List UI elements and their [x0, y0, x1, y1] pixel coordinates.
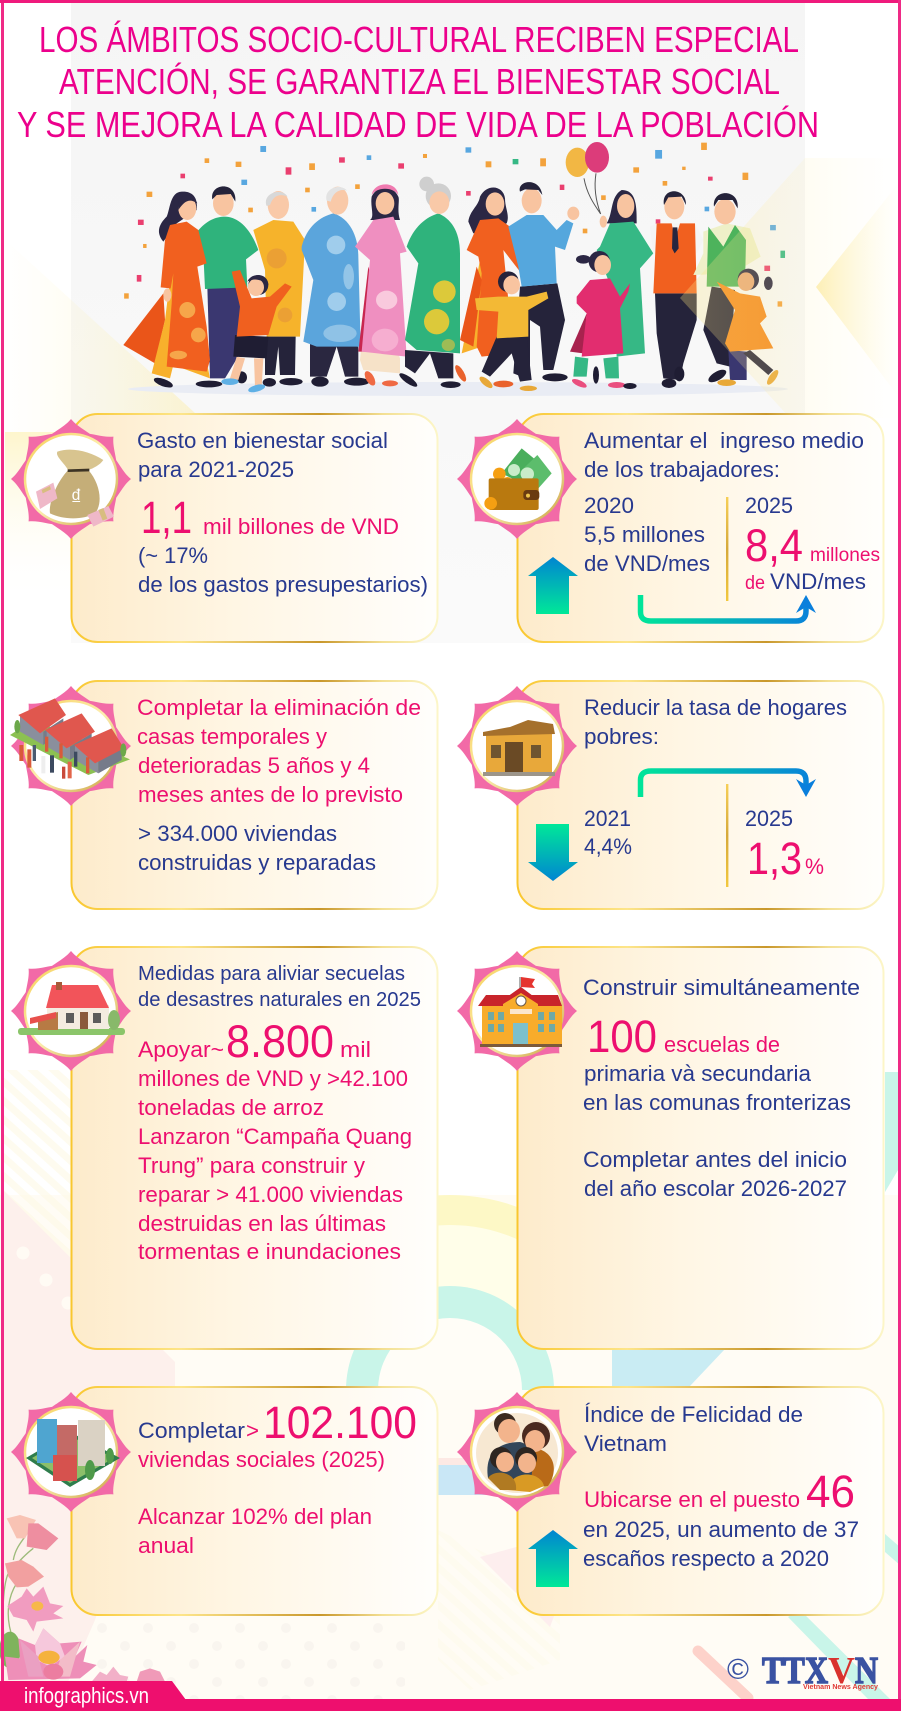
text: escuelas: Construir simultáneamente: [583, 975, 860, 1000]
right group of people: [453, 142, 780, 391]
text: escuelas: del año escolar 2026-2027: [584, 1176, 847, 1201]
text: 2020 value: 5,5 millones: [584, 522, 705, 547]
icon: money bag: [11, 419, 131, 539]
arrow: curved 2020 to 2025: [640, 595, 816, 621]
text: desastres: Trung” para construir y: [138, 1153, 366, 1178]
grandfather in blue: [302, 187, 369, 387]
text: felicidad: [583, 1402, 859, 1571]
lotus flowers bottom left: [0, 1515, 165, 1682]
girl in pink: [570, 251, 637, 389]
illustration: Vietnamese family group in ao dai: [123, 142, 788, 396]
boy in yellow: [475, 271, 548, 391]
text: escuelas: Completar antes del inicio: [583, 1147, 847, 1172]
bud flower: [7, 1515, 58, 1550]
text: viviendas: Completar: [138, 1418, 246, 1443]
panel: ingreso medio: [457, 414, 884, 642]
text: viviendas: >: [246, 1418, 259, 1443]
text: viviendas: viviendas sociales (2025): [138, 1447, 385, 1472]
logo: TTXVN: [727, 1650, 879, 1692]
icon: poor house: [457, 686, 577, 806]
child in orange: [221, 270, 292, 394]
text: felicidad: Vietnam: [584, 1431, 667, 1456]
woman in orange: [123, 192, 210, 390]
text: desastres: reparar > 41.000 viviendas: [138, 1182, 403, 1207]
balloons: [566, 142, 609, 214]
text: 2025 value: VND/mes: [770, 569, 866, 594]
text: 2025 value: 2025: [745, 493, 793, 518]
text: eliminación: Completar la eliminación de: [137, 695, 421, 720]
arrow: rank increase: [528, 1530, 578, 1587]
text: escuelas: escuelas de: [664, 1032, 780, 1057]
text: desastres: 8.800: [226, 1016, 334, 1067]
man in green vest: [693, 193, 761, 385]
text: escuelas: [583, 975, 860, 1201]
text: gasto: mil billones de VND: [203, 514, 399, 539]
text: 2025 value: millones: [810, 545, 880, 566]
grandfather in yellow: [253, 191, 305, 387]
text: gasto: [137, 428, 428, 597]
arrow: curved 2021 to 2025: [640, 771, 816, 797]
text: gasto: 1,1: [141, 492, 192, 543]
icon: school: [457, 951, 577, 1071]
text: desastres: toneladas de arroz: [138, 1095, 324, 1120]
arrow: decrease: [528, 824, 578, 881]
text: desastres: de desastres naturales en 2025: [138, 988, 421, 1011]
logo: TTXVN: N: [855, 1650, 878, 1692]
middle flower: [5, 1560, 44, 1587]
text: viviendas: [138, 1397, 417, 1558]
text: escuelas: 100: [587, 1011, 657, 1062]
large pink lotus: [5, 1628, 97, 1680]
upper pink lotus: [7, 1587, 63, 1632]
text: gasto: de los gastos presupestarios): [138, 572, 428, 597]
text: 2021 value: 4,4%: [584, 834, 632, 859]
arrow: increase: [528, 557, 578, 614]
text: desastres: mil: [340, 1037, 371, 1062]
icon: money bag: ₫: [71, 484, 82, 509]
girl in orange: [717, 269, 780, 386]
text: eliminación: construidas y reparadas: [138, 850, 376, 875]
panel: escuelas: [457, 947, 884, 1349]
panel: eliminación de casas temporales: [10, 681, 437, 909]
text: eliminación: casas temporales y: [137, 724, 328, 749]
panel: índice de felicidad: [457, 1387, 884, 1615]
text: desastres: millones de VND y >42.100: [138, 1066, 408, 1091]
text: 2025 value: de: [745, 573, 765, 594]
text: eliminación: deterioradas 5 años y 4: [138, 753, 370, 778]
icon: apartment buildings: [11, 1392, 131, 1512]
icon: happy family: [457, 1392, 577, 1512]
panel: viviendas sociales: [11, 1387, 437, 1615]
decorative yellow chevrons over the illustration: [680, 158, 901, 418]
confetti: [124, 143, 785, 307]
text: 2021 value: [584, 806, 632, 859]
text: 2020 value: de VND/mes: [584, 551, 710, 576]
man in blue: [508, 182, 579, 381]
man in orange vest: [650, 191, 703, 388]
woman in pink: [355, 184, 407, 387]
text: felicidad: Índice de Felicidad de: [584, 1402, 803, 1427]
small lotus buds at the footer: [92, 1667, 165, 1682]
left group of people: [123, 177, 461, 394]
text: felicidad: escaños respecto a 2020: [583, 1546, 829, 1571]
text: desastres: [138, 962, 421, 1264]
text: 2025 value: 2025: [745, 806, 793, 831]
text: ingreso heading: de los trabajadores:: [584, 457, 780, 482]
panel: gasto en bienestar social: [11, 414, 437, 642]
text: eliminación: > 334.000 viviendas: [138, 821, 337, 846]
grandmother in green: [398, 177, 461, 389]
icon: wallet: [457, 419, 577, 539]
woman in green: [597, 190, 653, 357]
text: desastres: destruidas en las últimas: [138, 1211, 386, 1236]
footer bar: [0, 1681, 901, 1711]
text: hogares heading: [584, 695, 847, 749]
text: 2025 value: [745, 493, 880, 594]
text: desastres: tormentas e inundaciones: [138, 1239, 401, 1264]
text: felicidad: en 2025, un aumento de 37: [583, 1517, 859, 1542]
panel: hogares pobres: [457, 681, 884, 909]
icon: house: [11, 951, 131, 1071]
text: escuelas: primaria và secundaria: [584, 1061, 811, 1086]
text: ingreso heading: Aumentar el ingreso medio: [584, 428, 864, 453]
logo: TTXVN: Vietnam News Agency: [803, 1682, 879, 1691]
text: felicidad: Ubicarse en el puesto: [584, 1487, 800, 1512]
text: hogares heading: pobres:: [584, 724, 659, 749]
text: gasto: Gasto en bienestar social: [137, 428, 388, 453]
text: desastres: Medidas para aliviar secuelas: [138, 962, 405, 985]
text: escuelas: en las comunas fronterizas: [583, 1090, 851, 1115]
text: 2025 value: 1,3: [747, 833, 802, 884]
text: 2025 value: %: [805, 854, 824, 879]
text: hogares heading: Reducir la tasa de hogares: [584, 695, 847, 720]
text: desastres: Lanzaron “Campaña Quang: [138, 1124, 412, 1149]
ground shadow: [128, 382, 788, 396]
text: ingreso heading: [584, 428, 864, 482]
icon: rebuilt houses: [10, 686, 131, 806]
title: [17, 19, 819, 145]
footer bar: infographics.vn: [24, 1683, 149, 1708]
text: 2020 value: [584, 493, 710, 576]
text: viviendas: anual: [138, 1533, 194, 1558]
logo: TTXVN: TTX: [762, 1650, 828, 1692]
logo: TTXVN: ©: [727, 1654, 749, 1686]
text: eliminación: meses antes de lo previsto: [138, 782, 403, 807]
text: gasto: (~ 17%: [138, 543, 208, 568]
logo: TTXVN: V: [828, 1650, 856, 1692]
woman in orange: [453, 187, 525, 387]
panel: desastres naturales: [11, 947, 437, 1349]
text: viviendas: 102.100: [263, 1397, 417, 1448]
text: 2025 value: 8,4: [745, 520, 803, 571]
text: eliminación: [137, 695, 421, 875]
text: desastres: Apoyar~: [138, 1037, 224, 1062]
text: 2020 value: 2020: [584, 493, 634, 518]
text: 2025 value: [745, 806, 824, 884]
text: felicidad: 46: [806, 1466, 855, 1517]
man in green: [196, 186, 258, 387]
text: viviendas: Alcanzar 102% del plan: [138, 1504, 372, 1529]
text: 2021 value: 2021: [584, 806, 631, 831]
text: gasto: para 2021-2025: [138, 457, 294, 482]
